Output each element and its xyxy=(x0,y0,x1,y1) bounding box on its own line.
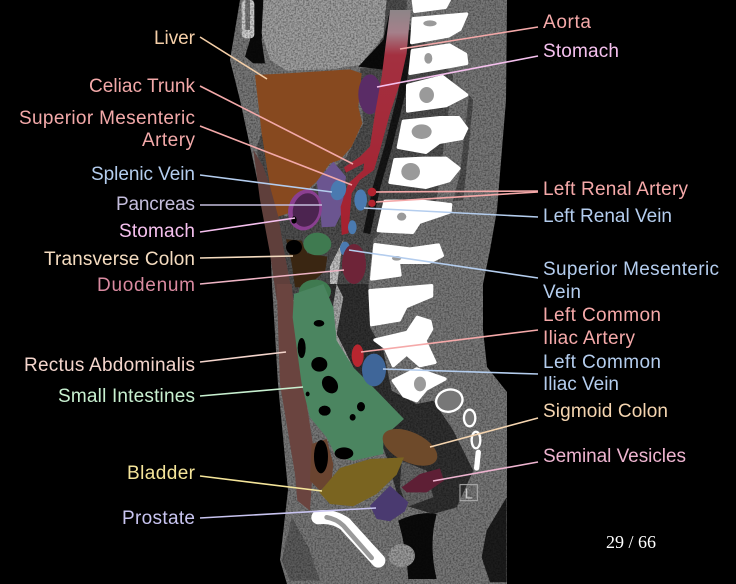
organ: pancreas xyxy=(317,162,346,227)
organ: left renal vein xyxy=(354,189,367,211)
labels: left column: Celiac Trunk xyxy=(89,76,196,97)
labels: right column: Aorta xyxy=(543,12,591,33)
labels: right column: Vein xyxy=(543,282,581,303)
organ: transverse colon xyxy=(286,239,327,287)
organs lower xyxy=(277,284,444,521)
spine and bones xyxy=(372,0,467,279)
organs upper xyxy=(253,10,411,304)
vertebra marrow xyxy=(392,20,437,261)
orientation marker: L xyxy=(465,487,473,503)
rib xyxy=(242,0,254,38)
organ: mesenteric vein segments xyxy=(340,220,357,256)
noise texture xyxy=(225,0,515,584)
slide counter: 29 / 66 xyxy=(606,532,656,552)
labels: left column xyxy=(19,28,196,529)
labels: right column: Sigmoid Colon xyxy=(543,401,668,422)
labels: right column: Iliac Vein xyxy=(543,374,619,395)
labels: left column: Stomach xyxy=(119,221,195,242)
organ: stomach upper xyxy=(358,74,382,114)
labels: left column: Liver xyxy=(154,28,196,49)
vertebrae lower xyxy=(370,286,445,401)
labels: left column: Splenic Vein xyxy=(91,164,195,185)
CT body silhouette xyxy=(230,0,507,584)
organ: descending brown loop xyxy=(310,439,333,491)
labels: left column: Rectus Abdominalis xyxy=(24,355,195,376)
organ: stomach lower xyxy=(284,186,326,234)
labels: right column: Left Renal Vein xyxy=(543,206,672,227)
heart xyxy=(262,0,387,71)
organ: left common iliac artery xyxy=(352,344,364,367)
organ: left renal arteries xyxy=(368,188,376,207)
labels: left column: Artery xyxy=(142,130,196,151)
labels: right column xyxy=(543,12,719,467)
sacral segments xyxy=(434,387,480,448)
organ: left common iliac vein xyxy=(362,354,386,386)
organ: seminal vesicles xyxy=(402,468,444,492)
labels: left column: Prostate xyxy=(122,508,195,529)
labels: right column: Iliac Artery xyxy=(543,328,636,349)
labels: left column: Pancreas xyxy=(116,194,195,215)
upper chest and dark tissue xyxy=(242,0,473,300)
organ: liver xyxy=(255,69,362,217)
vertebrae upper xyxy=(372,0,467,279)
organ: rectus abdominalis lower xyxy=(277,284,314,511)
lower body dark tissue xyxy=(282,284,507,582)
labels: left column: Transverse Colon xyxy=(44,249,195,270)
organ: sigmoid colon xyxy=(377,421,443,473)
organ: splenic vein xyxy=(328,178,348,202)
labels: right column: Superior Mesenteric xyxy=(543,259,719,280)
organ: small intestines xyxy=(293,284,404,461)
organ: bowel loops xyxy=(299,233,331,304)
orientation marker xyxy=(460,485,477,503)
labels: left column: Superior Mesenteric xyxy=(19,108,195,129)
labels: left column: Duodenum xyxy=(97,275,195,296)
labels: right column: Left Common xyxy=(543,352,661,373)
labels: left column: Small Intestines xyxy=(58,386,195,407)
labels: right column: Seminal Vesicles xyxy=(543,446,686,467)
labels: right column: Stomach xyxy=(543,41,619,62)
pubic bone xyxy=(318,517,378,561)
organ: aorta xyxy=(341,10,411,235)
labels: right column: Left Renal Artery xyxy=(543,179,688,200)
organ: bladder xyxy=(319,457,404,506)
leader lines xyxy=(200,27,538,518)
labels: left column: Bladder xyxy=(127,463,196,484)
organ: duodenum xyxy=(342,244,366,284)
labels: right column: Left Common xyxy=(543,305,661,326)
organ: rectus abdominalis upper xyxy=(253,150,293,300)
organ: prostate xyxy=(370,486,408,521)
